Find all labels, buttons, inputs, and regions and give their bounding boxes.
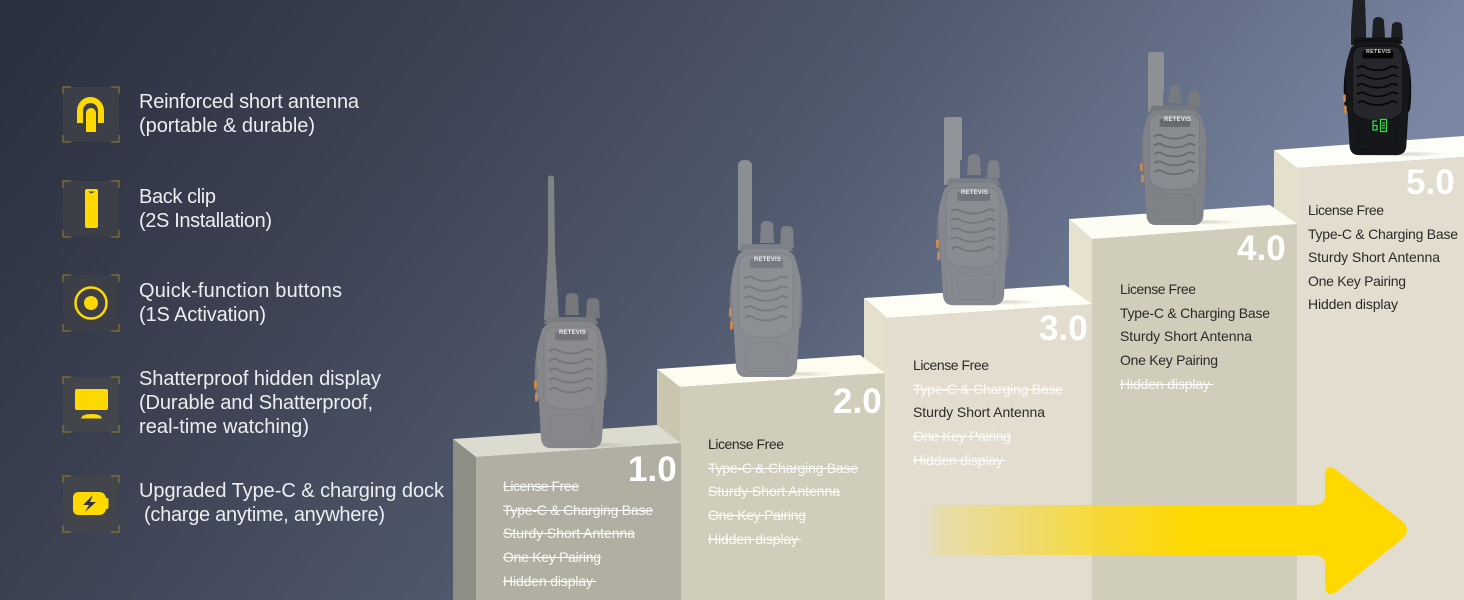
- step 1.0 feature list: Sturdy Short Antenna: [503, 525, 635, 541]
- step 2.0 feature list: One Key Pairing: [708, 507, 806, 523]
- step 5.0 feature list: Hidden display: [1308, 296, 1398, 312]
- feature text: charging: Upgraded Type-C & charging dock: [139, 480, 445, 502]
- feature text: buttons: [139, 280, 342, 326]
- walkie talkie 2.0: RETEVIS: [754, 257, 781, 263]
- feature text: back clip: Back clip: [139, 186, 216, 208]
- feature text: charging: (charge anytime, anywhere): [144, 504, 385, 526]
- feature: quick-function buttons: [63, 275, 342, 331]
- step 1.0 feature list: License Free: [503, 478, 579, 494]
- feature text: back clip: [139, 186, 272, 232]
- step 3.0 feature list: One Key Pairing: [913, 428, 1011, 444]
- step 1.0 feature list: [503, 478, 653, 589]
- step 3.0 feature list: [913, 357, 1063, 468]
- feature: hidden display: [63, 368, 381, 438]
- step 1.0: [453, 425, 681, 600]
- walkie talkie 4.0: RETEVIS: [1164, 117, 1191, 123]
- step 2.0: [657, 355, 885, 600]
- feature text: buttons: (1S Activation): [139, 304, 266, 326]
- walkie talkie 2.0: [729, 160, 834, 377]
- walkie talkie 1.0: RETEVIS: [559, 330, 586, 336]
- walkie talkie 3.0: RETEVIS: [961, 190, 988, 196]
- step 5.0 feature list: One Key Pairing: [1308, 273, 1406, 289]
- step number 5.0: 5.0: [1406, 163, 1455, 202]
- feature text: buttons: Quick-function buttons: [139, 280, 342, 302]
- step 4.0 feature list: Hidden display: [1120, 376, 1210, 392]
- icon: back clip: [63, 181, 119, 237]
- step 3.0 feature list: Type-C & Charging Base: [913, 381, 1063, 397]
- step 5.0 feature list: [1308, 202, 1458, 312]
- feature text: display: real-time watching): [139, 416, 309, 438]
- step 4.0 feature list: Sturdy Short Antenna: [1120, 328, 1252, 344]
- icon: button: [63, 275, 119, 331]
- step 1.0 feature list: One Key Pairing: [503, 549, 601, 565]
- feature text: display: [139, 368, 381, 438]
- feature text: display: Shatterproof hidden display: [139, 368, 381, 390]
- step number 2.0: 2.0: [833, 382, 882, 421]
- step 5.0 feature list: License Free: [1308, 202, 1384, 218]
- step 3.0 feature list: License Free: [913, 357, 989, 373]
- feature text: charging: [139, 480, 445, 526]
- feature: back clip: [63, 181, 272, 237]
- step 3.0: [864, 285, 1092, 600]
- feature text: antenna: Reinforced short antenna: [139, 91, 360, 113]
- step 4.0 feature list: [1120, 281, 1270, 392]
- walkie talkie 5.0: RETEVIS: [1366, 49, 1391, 55]
- step number 4.0: 4.0: [1237, 229, 1286, 268]
- icon: display: [63, 377, 119, 432]
- step 5.0: [1274, 136, 1464, 600]
- step 1.0 feature list: Type-C & Charging Base: [503, 502, 653, 518]
- step 3.0 feature list: Sturdy Short Antenna: [913, 404, 1045, 420]
- walkie talkie 1.0: [534, 176, 634, 448]
- hidden LED display: [1369, 120, 1386, 132]
- upgrade arrow: [925, 467, 1407, 594]
- feature text: display: (Durable and Shatterproof,: [139, 392, 373, 414]
- step 2.0 feature list: [708, 436, 858, 547]
- step 5.0 feature list: Type-C & Charging Base: [1308, 226, 1458, 242]
- step number 1.0: 1.0: [628, 450, 677, 489]
- step 4.0 feature list: License Free: [1120, 281, 1196, 297]
- feature: reinforced short antenna: [63, 87, 360, 142]
- walkie talkie 3.0: [936, 117, 1040, 305]
- feature text: antenna: [139, 91, 360, 137]
- feature: Type-C charging: [63, 476, 445, 532]
- walkie talkie 4.0: [1140, 52, 1240, 225]
- feature text: antenna: (portable & durable): [139, 115, 315, 137]
- step 5.0 feature list: Sturdy Short Antenna: [1308, 249, 1440, 265]
- icon: battery: [63, 476, 119, 532]
- feature text: back clip: (2S Installation): [139, 210, 272, 232]
- icon: antenna: [63, 87, 119, 142]
- step 4.0: [1069, 205, 1297, 600]
- step number 3.0: 3.0: [1039, 309, 1088, 348]
- step 4.0 feature list: Type-C & Charging Base: [1120, 305, 1270, 321]
- walkie talkie 5.0: [1343, 0, 1446, 157]
- step 4.0 feature list: One Key Pairing: [1120, 352, 1218, 368]
- step 2.0 feature list: Sturdy Short Antenna: [708, 483, 840, 499]
- step 1.0 feature list: Hidden display: [503, 573, 593, 589]
- step 2.0 feature list: License Free: [708, 436, 784, 452]
- step 2.0 feature list: Hidden display: [708, 531, 798, 547]
- step 2.0 feature list: Type-C & Charging Base: [708, 460, 858, 476]
- step 3.0 feature list: Hidden display: [913, 452, 1003, 468]
- feature list: [63, 87, 445, 532]
